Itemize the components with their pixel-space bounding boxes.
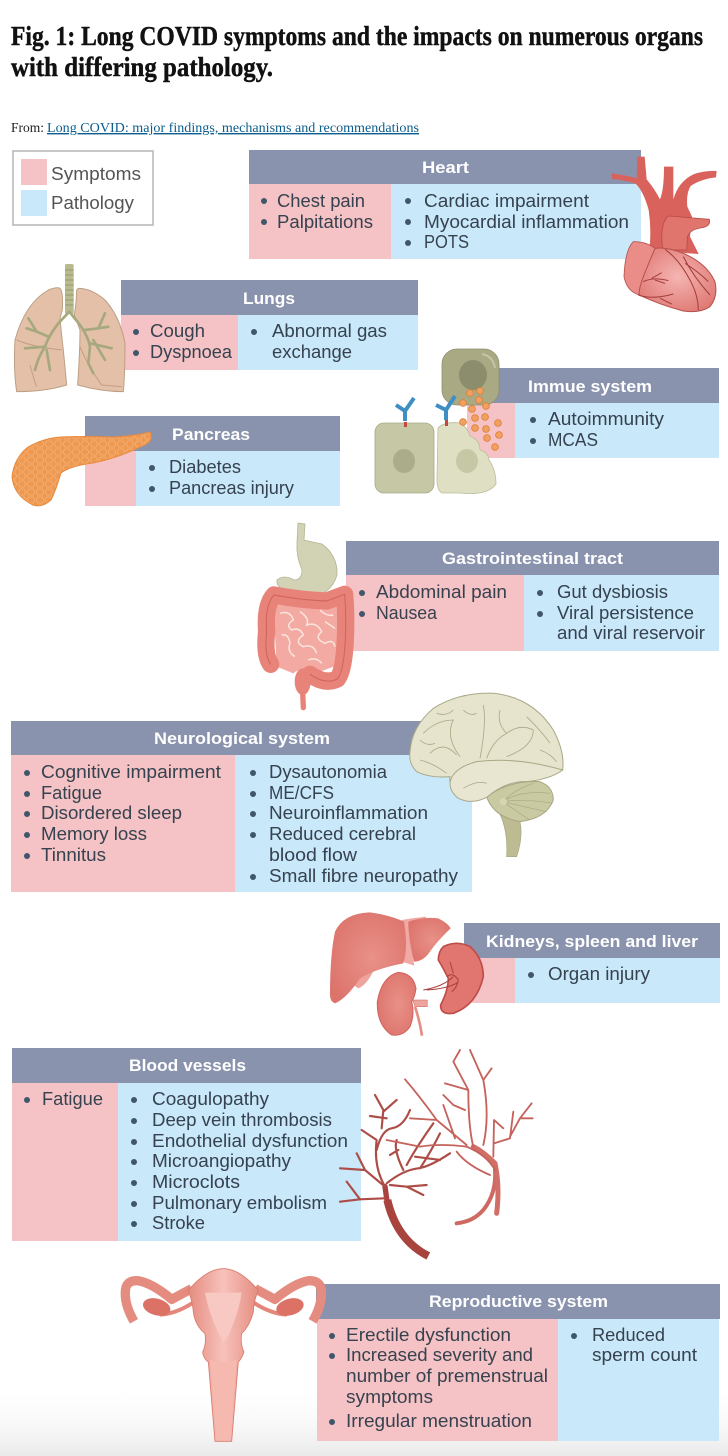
panel: reproductive system: Erectile dysfunction — [346, 1325, 511, 1345]
panel: kidneys, spleen and liver: Kidneys, spleen and liver — [486, 932, 698, 951]
icon: heart — [612, 157, 717, 312]
icon: blood vessels — [340, 1050, 533, 1256]
panel: pancreas: Diabetes — [169, 457, 241, 477]
panel: gastrointestinal tract — [346, 541, 719, 651]
panel: heart: Heart — [422, 158, 469, 177]
legend: Pathology — [51, 193, 134, 213]
panel: blood vessels: Deep vein thrombosis — [152, 1110, 332, 1130]
panel: heart: Myocardial inflammation — [424, 212, 629, 232]
icon: gastrointestinal tract — [266, 523, 346, 708]
panel: neurological system: Cognitive impairment — [41, 762, 221, 782]
panel: blood vessels: Blood vessels — [129, 1056, 246, 1075]
panel: heart: Chest pain — [277, 191, 365, 211]
panel: gastrointestinal tract: Gut dysbiosis — [557, 582, 668, 602]
panel: immune system — [467, 368, 719, 458]
panel: reproductive system — [316, 1284, 720, 1441]
panel: reproductive system: symptoms — [346, 1387, 433, 1407]
panel: neurological system: Dysautonomia — [269, 762, 388, 782]
panel: reproductive system: Irregular menstruation — [346, 1411, 532, 1431]
panel: neurological system: Disordered sleep — [41, 803, 182, 823]
source line: Long COVID: major findings, mechanisms and recommendations — [47, 121, 419, 136]
icon: brain — [410, 693, 563, 857]
panel: lungs: Dyspnoea — [150, 342, 233, 362]
panel: heart: Cardiac impairment — [424, 191, 589, 211]
panel: reproductive system: Increased severity and — [346, 1345, 533, 1365]
panel: blood vessels — [12, 1048, 361, 1241]
panel: blood vessels: Microangiopathy — [152, 1151, 291, 1171]
panel: immune system: Autoimmunity — [548, 409, 664, 429]
panel: blood vessels: Endothelial dysfunction — [152, 1131, 348, 1151]
panel: kidneys, spleen and liver — [464, 923, 720, 1003]
panel: reproductive system: Reduced — [592, 1325, 665, 1345]
panel: blood vessels: Coagulopathy — [152, 1089, 269, 1109]
panel: neurological system: ME/CFS — [269, 783, 334, 803]
panel: lungs: Abnormal gas — [272, 321, 387, 341]
panel: neurological system: Small fibre neuropathy — [269, 866, 458, 886]
panel: lungs: Lungs — [243, 289, 295, 308]
icon: liver and kidneys — [330, 912, 483, 1036]
panel: immune system: MCAS — [548, 430, 598, 450]
panel: lungs: exchange — [272, 342, 352, 362]
source line: From: — [11, 121, 44, 136]
icon: reproductive organs — [125, 1269, 321, 1441]
panel: blood vessels: Pulmonary embolism — [152, 1193, 327, 1213]
panel: neurological system: Neuroinflammation — [269, 803, 428, 823]
panel: neurological system: blood flow — [269, 845, 358, 865]
panel: neurological system: Neurological system — [154, 729, 330, 748]
panel: neurological system: Tinnitus — [41, 845, 106, 865]
panel: reproductive system: number of premenstrual — [346, 1366, 548, 1386]
panel: heart — [249, 150, 641, 259]
legend: Symptoms — [51, 164, 141, 184]
panel: neurological system: Memory loss — [41, 824, 147, 844]
panel: blood vessels: Fatigue — [42, 1089, 103, 1109]
icon: immune cells — [375, 349, 502, 494]
panel: lungs — [121, 280, 418, 370]
panel: heart: POTS — [424, 232, 469, 252]
panel: gastrointestinal tract: Nausea — [376, 603, 438, 623]
panel: neurological system — [11, 721, 472, 892]
panel: gastrointestinal tract: Viral persistence — [557, 603, 694, 623]
panel: neurological system: Reduced cerebral — [269, 824, 416, 844]
icon: lungs — [14, 264, 125, 392]
panel: immune system: Immue system — [528, 377, 652, 396]
panel: blood vessels: Stroke — [152, 1213, 205, 1233]
title: with differing pathology. — [11, 52, 273, 82]
icon: pancreas — [12, 432, 151, 506]
panel: pancreas: Pancreas — [172, 425, 250, 444]
panel: neurological system: Fatigue — [41, 783, 102, 803]
panel: heart: Palpitations — [277, 212, 373, 232]
panel: pancreas — [85, 416, 340, 506]
panel: blood vessels: Microclots — [152, 1172, 240, 1192]
panel: pancreas: Pancreas injury — [169, 478, 294, 498]
panel: lungs: Cough — [150, 321, 205, 341]
panel: gastrointestinal tract: and viral reservoir — [557, 623, 705, 643]
panel: gastrointestinal tract: Gastrointestinal tract — [442, 549, 623, 568]
panel: kidneys, spleen and liver: Organ injury — [548, 964, 650, 984]
legend — [13, 151, 153, 225]
panel: reproductive system: Reproductive system — [429, 1292, 608, 1311]
title — [11, 21, 703, 82]
panel: gastrointestinal tract: Abdominal pain — [376, 582, 507, 602]
panel: reproductive system: sperm count — [592, 1345, 697, 1365]
